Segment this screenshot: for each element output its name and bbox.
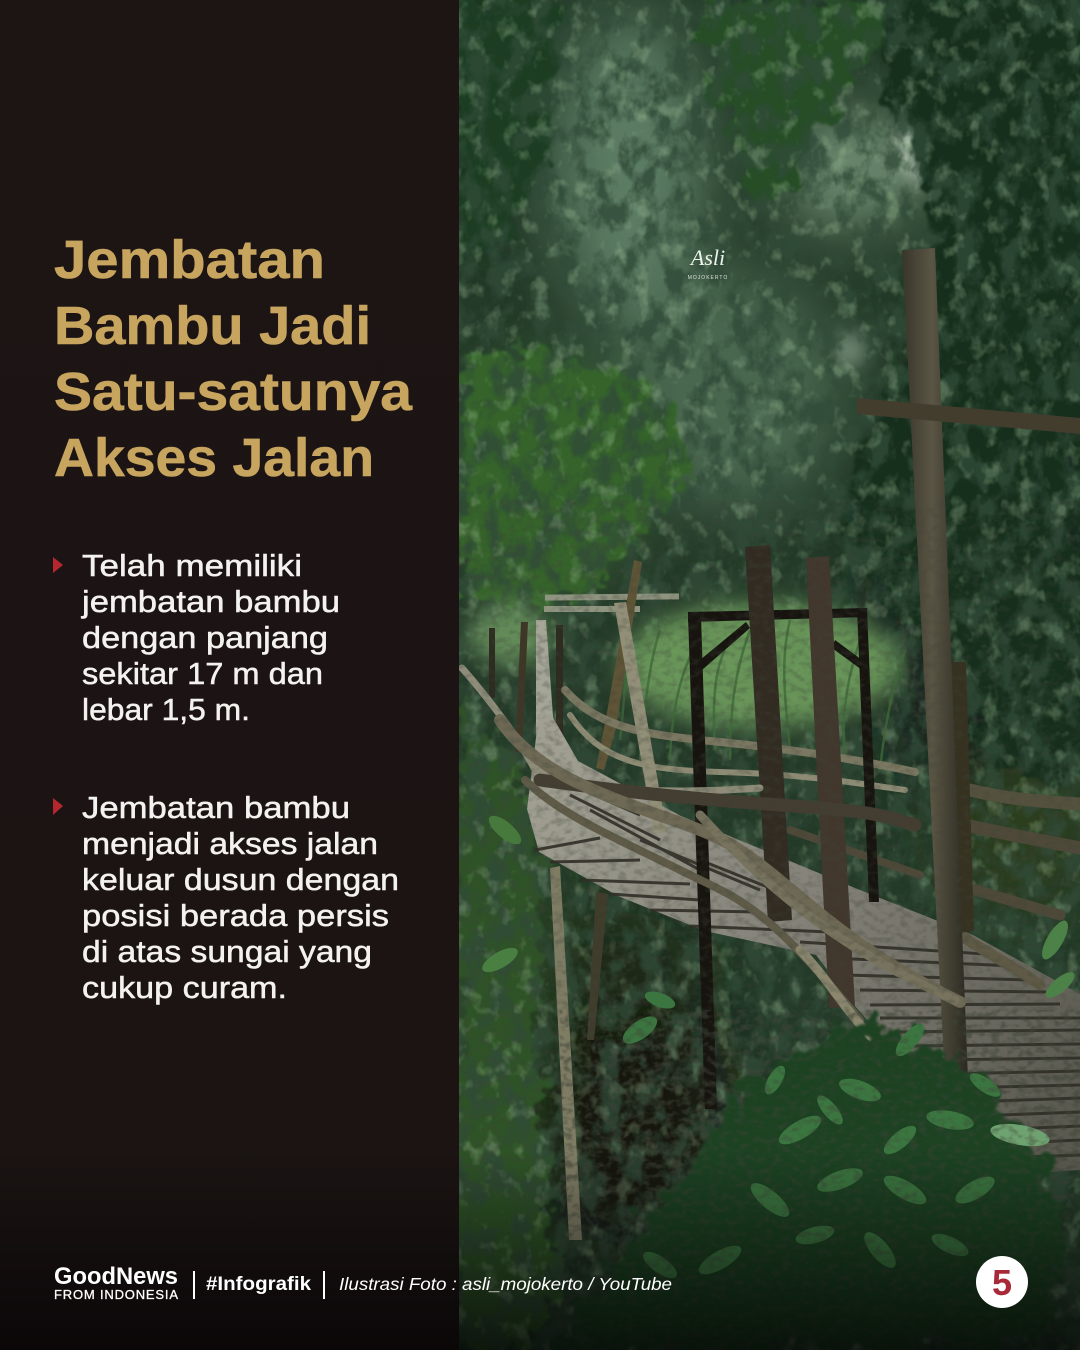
photo bottom shade <box>459 1150 1080 1350</box>
bright sky gaps through the canopy <box>830 124 924 377</box>
grain over bridge and forest <box>459 500 1080 1200</box>
light diagonal brace <box>614 602 667 834</box>
foreground plants <box>479 811 1080 1350</box>
page number badge: 5 <box>992 1262 1012 1303</box>
title: Akses Jalan <box>54 428 374 488</box>
bullet point 2 <box>53 790 399 1005</box>
title <box>54 230 413 488</box>
title: Bambu Jadi <box>54 296 371 356</box>
bullet point 2: Jembatan bambu <box>82 790 350 825</box>
forest colour masses <box>440 0 1080 1250</box>
bullet point 1: dengan panjang <box>82 620 328 655</box>
logo: GoodNews from Indonesia: GoodNews <box>54 1263 178 1290</box>
left dark panel <box>0 0 459 1350</box>
bullet point 2: di atas sungai yang <box>82 934 372 969</box>
rear handrails <box>565 690 1080 985</box>
bullet point 2: cukup curam. <box>82 970 287 1005</box>
bullet point 1: sekitar 17 m dan <box>82 656 323 691</box>
page number badge <box>976 1256 1028 1308</box>
title: Satu-satunya <box>54 362 413 422</box>
far bridge gate <box>489 560 679 770</box>
watermark <box>688 250 727 279</box>
foliage light texture <box>459 0 1080 1350</box>
bullet point 2: posisi berada persis <box>82 898 389 933</box>
bullet point 1 <box>53 548 340 727</box>
logo: GoodNews from Indonesia <box>54 1263 178 1302</box>
tall grass strokes <box>620 620 905 770</box>
hashtag: #Infografik <box>206 1274 311 1295</box>
bright meadow behind the bridge <box>470 603 900 727</box>
vertical posts <box>550 248 1080 1240</box>
bullet point 2: menjadi akses jalan <box>82 826 378 861</box>
bullet marker 1 <box>53 557 63 573</box>
photo credit: Ilustrasi Foto : asli_mojokerto / YouTube <box>339 1274 672 1294</box>
bullet point 1: Telah memiliki <box>82 548 302 583</box>
bullet marker 2 <box>53 798 63 815</box>
bullet point 1: lebar 1,5 m. <box>82 692 250 727</box>
watermark: MOJOKERTO <box>688 275 728 281</box>
bullet point 1: jembatan bambu <box>81 584 340 619</box>
foliage shadow texture <box>459 0 1080 1350</box>
bridge deck <box>527 714 1080 1175</box>
logo: GoodNews from Indonesia: FROM INDONESIA <box>54 1287 178 1302</box>
watermark: Asli <box>689 245 725 270</box>
photo base colour <box>459 0 1080 1350</box>
bullet point 2: keluar dusun dengan <box>82 862 399 897</box>
title: Jembatan <box>54 230 325 290</box>
front handrails <box>462 668 960 1050</box>
dark timber frame <box>688 608 879 1109</box>
canopy shapes <box>459 0 1080 1350</box>
deck planks <box>535 780 1080 1158</box>
footer <box>54 1256 1028 1308</box>
photo: bamboo bridge in the forest <box>440 0 1080 1350</box>
